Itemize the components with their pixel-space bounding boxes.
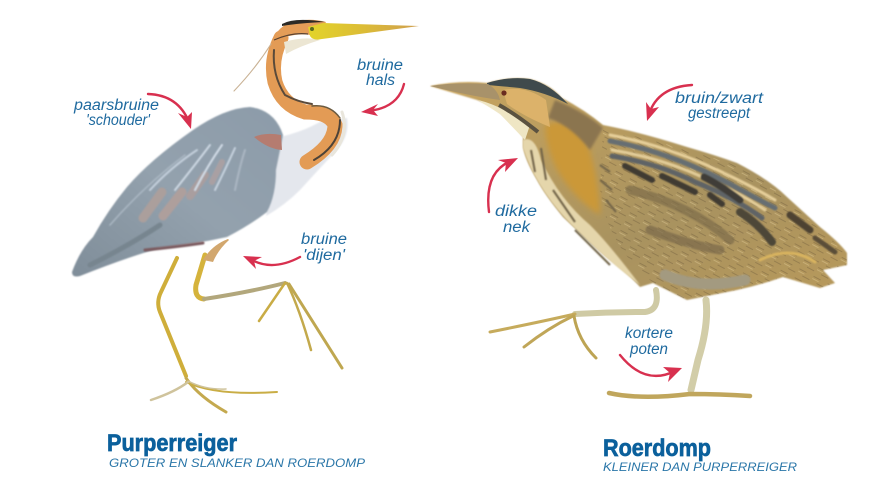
bittern face: [503, 89, 550, 127]
label: paarsbruine schouder: paarsbruine: [73, 97, 159, 114]
label: bruine dijen: 'dijen': [303, 247, 346, 264]
bittern body: [430, 78, 847, 300]
purple heron head: [272, 20, 326, 42]
arrow: nek: [488, 158, 518, 212]
purple heron shoulder patch: [254, 134, 282, 150]
bittern legs: [490, 290, 750, 397]
label: dikke nek: nek: [503, 219, 531, 236]
purple heron cheek: [284, 38, 320, 54]
purple heron neck: [234, 38, 344, 162]
title: Purperreiger: Purperreiger: [107, 430, 237, 457]
purple heron crown: [282, 20, 325, 26]
label: paarsbruine schouder: [73, 97, 159, 129]
title: Purperreiger: [107, 430, 365, 470]
illustration: bittern: [430, 78, 847, 397]
purple heron chest plumes: [266, 118, 348, 216]
bittern pale underparts: [523, 139, 640, 285]
label: dikke nek: [495, 203, 537, 236]
label: bruin/zwart gestreept: [675, 90, 764, 122]
bittern crown: [487, 78, 568, 104]
label: kortere poten: [625, 325, 673, 358]
purple heron feather details: [90, 145, 245, 265]
label: bruine dijen: bruine: [301, 231, 347, 248]
label: bruine dijen: [301, 231, 347, 264]
purple heron legs: [151, 255, 342, 412]
purple heron body: [72, 107, 283, 276]
bittern orange neck patch: [545, 122, 600, 215]
title: Purperreiger: GROTER EN SLANKER DAN ROERDOMP: [109, 456, 365, 470]
label: bruine hals: hals: [366, 72, 395, 89]
bittern feather texture: [600, 130, 847, 300]
label: kortere poten: poten: [629, 341, 668, 358]
arrow: gestreept: [646, 85, 692, 121]
label: paarsbruine schouder: 'schouder': [86, 112, 151, 129]
label: bruin/zwart gestreept: gestreept: [688, 105, 751, 122]
label: dikke nek: dikke: [495, 203, 537, 220]
purple heron bill: [308, 23, 419, 40]
bittern throat: [478, 100, 530, 140]
arrow: hals: [361, 84, 404, 116]
bittern bill: [430, 83, 500, 100]
label: kortere poten: kortere: [625, 325, 673, 342]
label: bruine hals: bruine: [357, 57, 403, 74]
bittern moustache stripe: [499, 105, 538, 132]
arrow: schouder: [148, 94, 192, 129]
bittern nape streaks: [548, 100, 603, 150]
label: bruine hals: [357, 57, 403, 89]
title: Roerdomp: Roerdomp: [603, 435, 711, 462]
arrow: dijen: [243, 256, 300, 269]
title: Roerdomp: [603, 435, 797, 474]
title: Roerdomp: KLEINER DAN PURPERREIGER: [603, 460, 797, 474]
purple heron thigh: [203, 239, 229, 262]
illustration: purple heron: [72, 20, 419, 412]
bittern breast streaks: [531, 148, 616, 265]
label: bruin/zwart gestreept: bruin/zwart: [675, 90, 764, 107]
arrow: poten: [620, 355, 682, 382]
bittern back stripes: [610, 135, 835, 284]
